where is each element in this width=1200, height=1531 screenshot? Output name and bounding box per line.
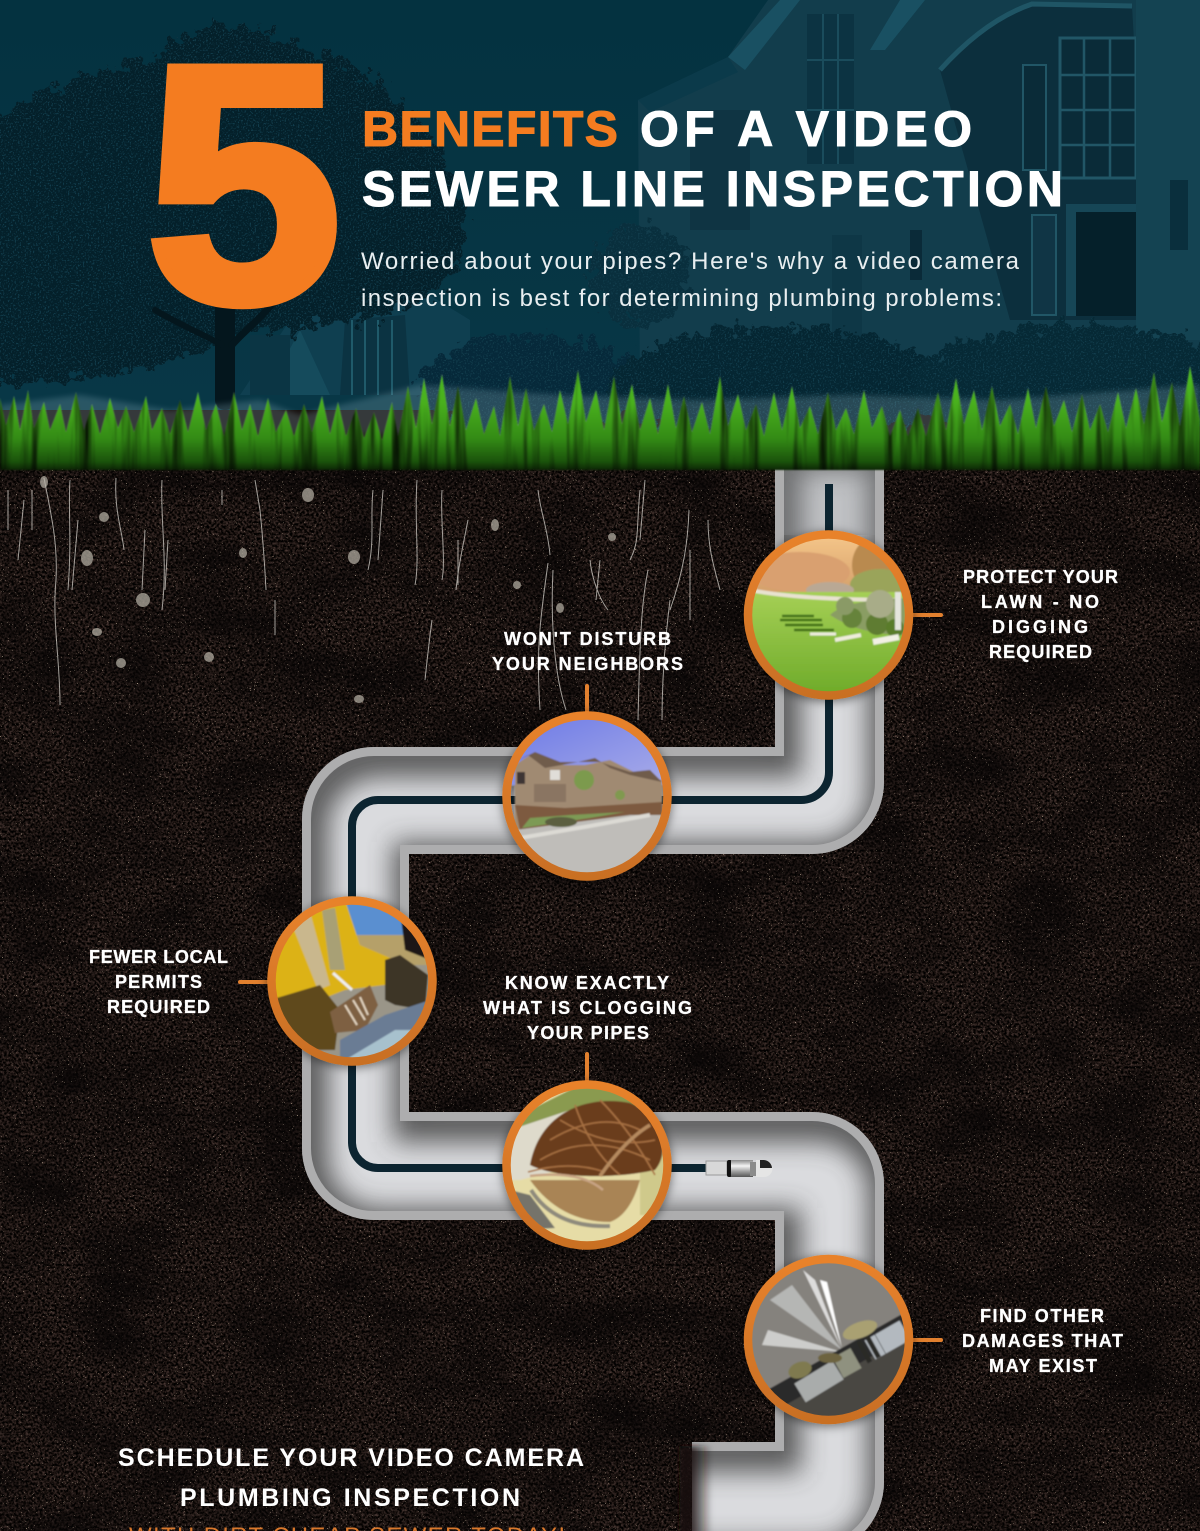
call to action: SCHEDULE YOUR VIDEO CAMERA xyxy=(118,1444,584,1472)
side window xyxy=(1023,65,1056,315)
pipe end fade xyxy=(680,1446,712,1531)
label: fewer local permits xyxy=(89,947,228,1017)
pipe rim xyxy=(302,440,884,1531)
label: find other damages xyxy=(962,1306,1123,1376)
large window xyxy=(1060,38,1136,178)
small house behind tree xyxy=(240,280,470,395)
circle: leaking pipe photo xyxy=(745,1255,915,1425)
heading line 1: BENEFITS xyxy=(362,101,618,157)
shrubs xyxy=(420,225,1200,445)
soil ground xyxy=(0,462,1200,1531)
label: know what is clogging: YOUR PIPES xyxy=(527,1023,649,1043)
heading line 1: OF A VIDEO xyxy=(640,101,972,157)
inner shadow xyxy=(307,449,889,1531)
pipe top shade xyxy=(784,465,875,535)
intro line 1: Worried about your pipes? Here's why a video camera xyxy=(361,248,1020,275)
circle: lawn photo xyxy=(745,530,915,702)
label: protect your lawn: DIGGING xyxy=(992,617,1088,637)
tree trunk xyxy=(155,300,275,400)
circle: permit worker photo xyxy=(270,900,435,1065)
label: know what is clogging: KNOW EXACTLY xyxy=(505,973,669,993)
title block xyxy=(146,0,1063,374)
label: know what is clogging xyxy=(483,973,692,1043)
roots and pebbles xyxy=(8,476,720,720)
circle: neighborhood photo xyxy=(505,715,670,880)
label: find other damages: MAY EXIST xyxy=(989,1356,1097,1376)
label: protect your lawn: REQUIRED xyxy=(989,642,1092,662)
camera cable xyxy=(352,484,829,1168)
grass back glow xyxy=(0,385,1200,440)
connector lines xyxy=(240,615,941,1340)
label: find other damages: FIND OTHER xyxy=(980,1306,1104,1326)
header background scene xyxy=(0,0,1200,445)
grass strip xyxy=(0,366,1200,470)
label: protect your lawn xyxy=(963,567,1118,662)
call to action: PLUMBING INSPECTION xyxy=(180,1484,520,1512)
label: protect your lawn: LAWN - NO xyxy=(981,592,1099,612)
sewer pipe xyxy=(280,440,900,1531)
label: fewer local permits: FEWER LOCAL xyxy=(89,947,228,967)
label: find other damages: DAMAGES THAT xyxy=(962,1331,1123,1351)
camera head xyxy=(706,1160,772,1177)
label: fewer local permits: REQUIRED xyxy=(107,997,210,1017)
heading line 2: SEWER LINE INSPECTION xyxy=(362,161,1063,217)
label: won't disturb your neighbors xyxy=(492,629,683,674)
front door xyxy=(1066,204,1156,316)
upper window xyxy=(807,14,854,164)
call to action xyxy=(118,1444,584,1531)
house facade xyxy=(638,0,1200,400)
label: protect your lawn: PROTECT YOUR xyxy=(963,567,1118,587)
big number 5: 5 xyxy=(146,0,342,374)
label: fewer local permits: PERMITS xyxy=(115,972,202,992)
intro line 2: inspection is best for determining plumbing problems: xyxy=(361,285,1002,312)
circle: tree roots in pipe photo xyxy=(505,1084,670,1250)
roots xyxy=(8,478,720,720)
pebbles xyxy=(40,476,616,703)
label: won't disturb your neighbors: WON'T DISTURB xyxy=(504,629,671,649)
pipe body xyxy=(280,440,900,1531)
label: won't disturb your neighbors: YOUR NEIGHBORS xyxy=(492,654,683,674)
tree foliage xyxy=(0,26,465,383)
label: know what is clogging: WHAT IS CLOGGING xyxy=(483,998,692,1018)
entry arch recess xyxy=(940,4,1150,320)
